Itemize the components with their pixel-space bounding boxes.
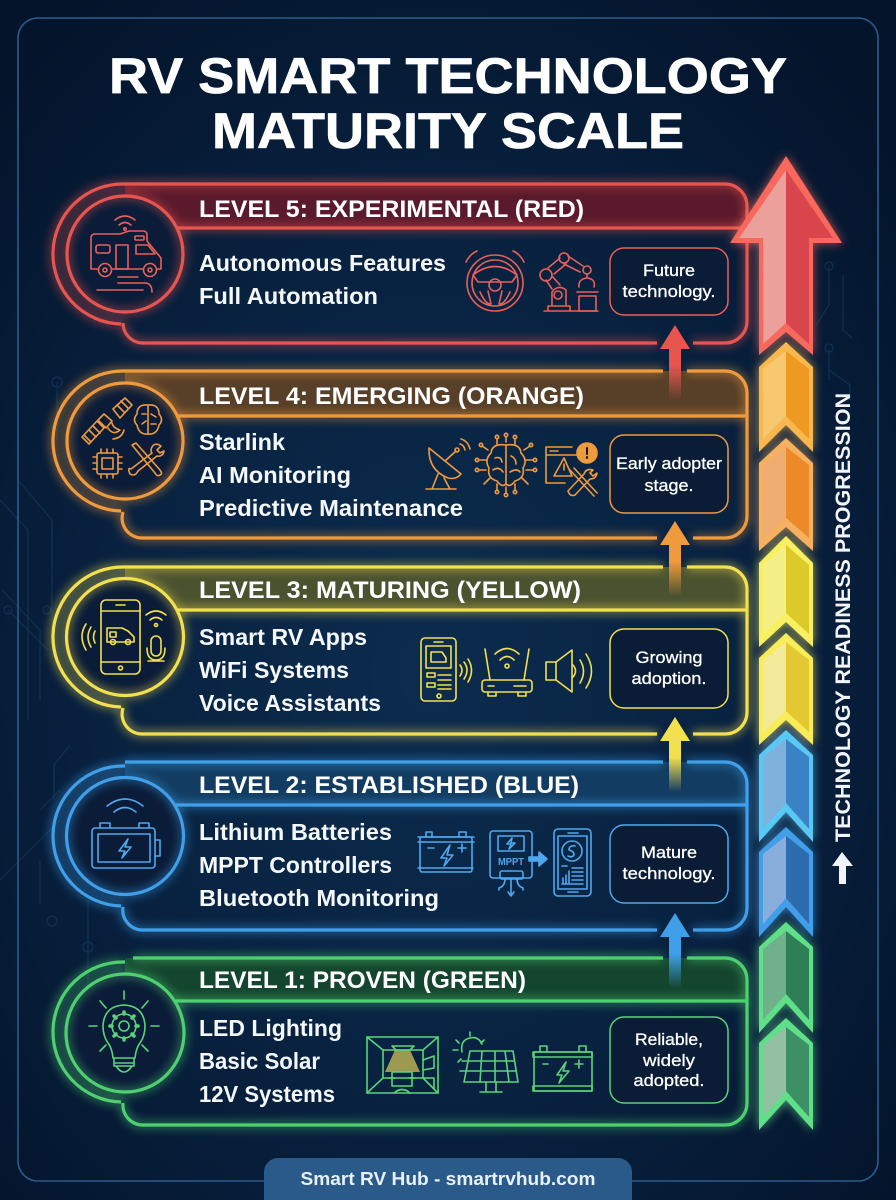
list: level 1 technologies bbox=[199, 1015, 342, 1107]
icon: MPPT controller: MPPT bbox=[498, 857, 524, 868]
arrow: level 4 to level 5 bbox=[660, 325, 690, 400]
list: level 5 technologies: Autonomous Features bbox=[199, 250, 446, 276]
icon: white up arrow bbox=[832, 852, 853, 884]
list: level 4 technologies: Predictive Maintenance bbox=[199, 495, 463, 521]
heading: level 1: LEVEL 1: PROVEN (GREEN) bbox=[199, 967, 526, 994]
callout: level 5 bbox=[610, 248, 728, 315]
callout: level 5: Future bbox=[643, 261, 695, 280]
callout: level 2: technology. bbox=[622, 864, 716, 883]
callout: level 2 bbox=[610, 825, 728, 903]
panel: level 4 emerging bbox=[53, 371, 747, 538]
arrow: level 1 to level 2 bbox=[660, 913, 690, 988]
callout: level 1: Reliable, bbox=[635, 1030, 703, 1049]
title bbox=[109, 48, 787, 159]
icon: battery bbox=[418, 832, 474, 872]
icon: RV interior with LED light bbox=[367, 1037, 438, 1093]
icon: alert window and tools bbox=[546, 443, 597, 496]
panel: level 5 experimental bbox=[53, 184, 747, 343]
list: level 2 technologies: Bluetooth Monitoring bbox=[199, 885, 439, 911]
heading: level 4: LEVEL 4: EMERGING (ORANGE) bbox=[199, 383, 584, 410]
list: level 1 technologies: 12V Systems bbox=[199, 1081, 335, 1107]
list: level 3 technologies: WiFi Systems bbox=[199, 657, 349, 683]
footer tab bbox=[264, 1158, 632, 1200]
icon: RV with wifi bbox=[91, 216, 161, 292]
vertical axis label: TECHNOLOGY READINESS PROGRESSION bbox=[832, 393, 855, 842]
connector lines between levels bbox=[119, 323, 123, 957]
icon: phone app bbox=[421, 638, 472, 701]
list: level 5 technologies bbox=[199, 250, 446, 309]
icon: satellite, brain, chip and tools bbox=[82, 398, 164, 478]
chevron: yellow upper bbox=[759, 536, 813, 647]
callout: level 3: adoption. bbox=[632, 669, 706, 688]
icon: solar panel bbox=[453, 1032, 518, 1092]
list: level 4 technologies: AI Monitoring bbox=[199, 462, 351, 488]
callout: level 4: Early adopter bbox=[616, 454, 722, 473]
footer tab: Smart RV Hub - smartrvhub.com bbox=[300, 1169, 596, 1189]
icon: brain network bbox=[475, 433, 537, 497]
panel: level 1 proven bbox=[53, 958, 747, 1125]
icon: steering wheel bbox=[466, 251, 524, 311]
list: level 2 technologies: MPPT Controllers bbox=[199, 852, 392, 878]
chevron: yellow lower bbox=[759, 633, 813, 745]
callout: level 1: widely bbox=[642, 1051, 696, 1070]
list: level 4 technologies: Starlink bbox=[199, 429, 285, 455]
icon: robot arm bbox=[540, 253, 598, 311]
panel: level 2 established bbox=[53, 762, 747, 930]
progression arrow column bbox=[730, 156, 842, 1130]
heading: level 3: LEVEL 3: MATURING (YELLOW) bbox=[199, 577, 581, 604]
chevron: orange lower bbox=[759, 438, 813, 551]
callout: level 1: adopted. bbox=[634, 1071, 704, 1090]
list: level 3 technologies: Smart RV Apps bbox=[199, 624, 367, 650]
list: level 1 technologies: Basic Solar bbox=[199, 1048, 320, 1074]
panel: level 3 maturing bbox=[53, 567, 747, 734]
icon: satellite dish bbox=[426, 439, 470, 489]
list: level 2 technologies bbox=[199, 819, 439, 911]
icon: 12V battery bbox=[533, 1046, 592, 1091]
icon: phone with RV app, wifi and mic bbox=[82, 600, 166, 674]
callout: level 1 bbox=[610, 1017, 728, 1103]
chevron: orange upper bbox=[759, 342, 813, 452]
chevron: green upper bbox=[759, 922, 813, 1033]
list: level 2 technologies: Lithium Batteries bbox=[199, 819, 392, 845]
callout: level 5: technology. bbox=[622, 282, 716, 301]
icon: light bulb with gear bbox=[89, 991, 159, 1072]
arrow: level 2 to level 3 bbox=[660, 717, 690, 792]
icon: battery with wifi bbox=[92, 799, 160, 868]
list: level 3 technologies: Voice Assistants bbox=[199, 690, 381, 716]
list: level 1 technologies: LED Lighting bbox=[199, 1015, 342, 1041]
callout: level 2: Mature bbox=[641, 843, 697, 862]
chevron: blue upper bbox=[759, 730, 813, 842]
arrow head: red top bbox=[730, 156, 842, 355]
icon: phone monitoring bbox=[554, 829, 591, 896]
callout: level 3: Growing bbox=[636, 648, 702, 667]
title: MATURITY SCALE bbox=[212, 103, 684, 159]
title: RV SMART TECHNOLOGY bbox=[109, 48, 787, 104]
icon: wifi router bbox=[482, 648, 532, 696]
icon: speaker bbox=[546, 650, 592, 692]
heading: level 5: LEVEL 5: EXPERIMENTAL (RED) bbox=[199, 196, 584, 223]
callout: level 4: stage. bbox=[644, 476, 694, 495]
arrow: level 3 to level 4 bbox=[660, 521, 690, 596]
chevron: green lower bbox=[759, 1018, 813, 1130]
list: level 3 technologies bbox=[199, 624, 381, 716]
chevron: blue lower bbox=[759, 827, 813, 937]
heading: level 2: LEVEL 2: ESTABLISHED (BLUE) bbox=[199, 772, 579, 799]
list: level 5 technologies: Full Automation bbox=[199, 283, 378, 309]
icon: MPPT controller bbox=[490, 831, 547, 896]
callout: level 4 bbox=[610, 435, 728, 513]
list: level 4 technologies bbox=[199, 429, 463, 521]
callout: level 3 bbox=[610, 629, 728, 708]
